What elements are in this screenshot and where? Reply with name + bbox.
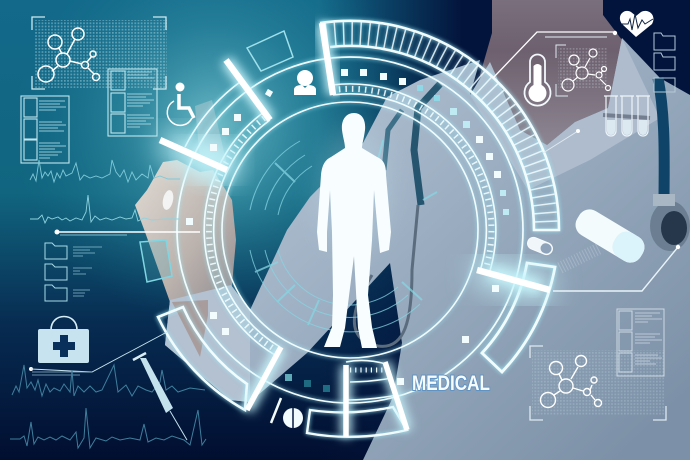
folders top right — [654, 33, 675, 92]
icon: half circle pill — [283, 407, 303, 429]
folder 3 — [45, 285, 67, 301]
icon: test tubes — [604, 96, 650, 136]
top right dark stethoscope tube — [658, 78, 664, 205]
hand and forearm — [135, 160, 236, 302]
left stethoscope tube — [414, 84, 440, 205]
inner ring — [222, 102, 478, 358]
collar shadow — [603, 115, 650, 118]
folder text lines — [73, 247, 102, 296]
central ring system — [158, 21, 559, 437]
index finger — [195, 100, 227, 165]
folder 2 — [45, 264, 67, 280]
wedge bottom centre — [307, 360, 407, 437]
callout polygon with thermometer link — [493, 31, 617, 78]
tick band left — [204, 112, 280, 355]
folder list — [45, 243, 102, 301]
middle ring — [177, 57, 523, 403]
icon: person avatar — [294, 70, 316, 95]
molecule — [38, 28, 100, 82]
pill callout line — [553, 245, 680, 291]
bars — [160, 23, 550, 437]
stethoscope head — [650, 194, 690, 251]
MEDICAL label: MEDICAL — [412, 372, 490, 395]
indicator squares — [186, 69, 509, 392]
powder particles — [560, 248, 600, 268]
glowing bars — [160, 23, 550, 437]
folder 1 — [45, 243, 67, 259]
corner brackets — [32, 17, 166, 89]
outer ticked wedge top right — [320, 21, 559, 230]
stethoscope loop — [354, 205, 418, 346]
figure glow — [320, 130, 388, 250]
cuff — [165, 285, 250, 402]
molecule panel bottom right — [530, 346, 666, 420]
bar glow halos — [165, 23, 550, 437]
collar — [470, 38, 660, 190]
inner faint arcs — [250, 140, 437, 332]
icon: tilted rectangle frame — [247, 31, 293, 71]
tilted teal document — [140, 240, 172, 282]
ECG line 4 — [10, 408, 206, 448]
icon: wheelchair — [167, 82, 194, 125]
kit callout line — [29, 332, 167, 375]
ECG line 2 — [30, 195, 180, 223]
document card 2 — [108, 69, 157, 136]
wedge bottom left — [158, 307, 247, 410]
neck and chest — [480, 0, 622, 145]
document card bottom right — [617, 309, 664, 376]
slash mark — [271, 398, 281, 423]
icon: thermometer — [524, 55, 550, 106]
chest callout line — [543, 129, 580, 153]
icon: small capsule — [526, 236, 554, 256]
pointer line — [54, 230, 200, 235]
icon: medical kit — [38, 316, 89, 363]
molecule panel top left — [32, 17, 167, 89]
tick band top right — [332, 84, 496, 274]
dotted field — [34, 20, 167, 88]
molecule panel top right — [556, 45, 610, 96]
figure silhouette — [317, 113, 391, 348]
wedge bottom right — [482, 263, 555, 372]
document card 1 — [21, 96, 69, 163]
coat body and sleeve — [165, 38, 690, 460]
ECG line 3 — [12, 365, 205, 396]
ECG line 1 — [30, 160, 180, 182]
thumbnail — [161, 189, 175, 211]
upper left outer arc — [185, 82, 240, 147]
arc ticks — [255, 140, 437, 325]
icon: large capsule — [571, 205, 649, 267]
icon: heart with pulse — [620, 11, 653, 37]
wrist fold — [172, 300, 208, 357]
icon: syringe — [133, 353, 187, 440]
